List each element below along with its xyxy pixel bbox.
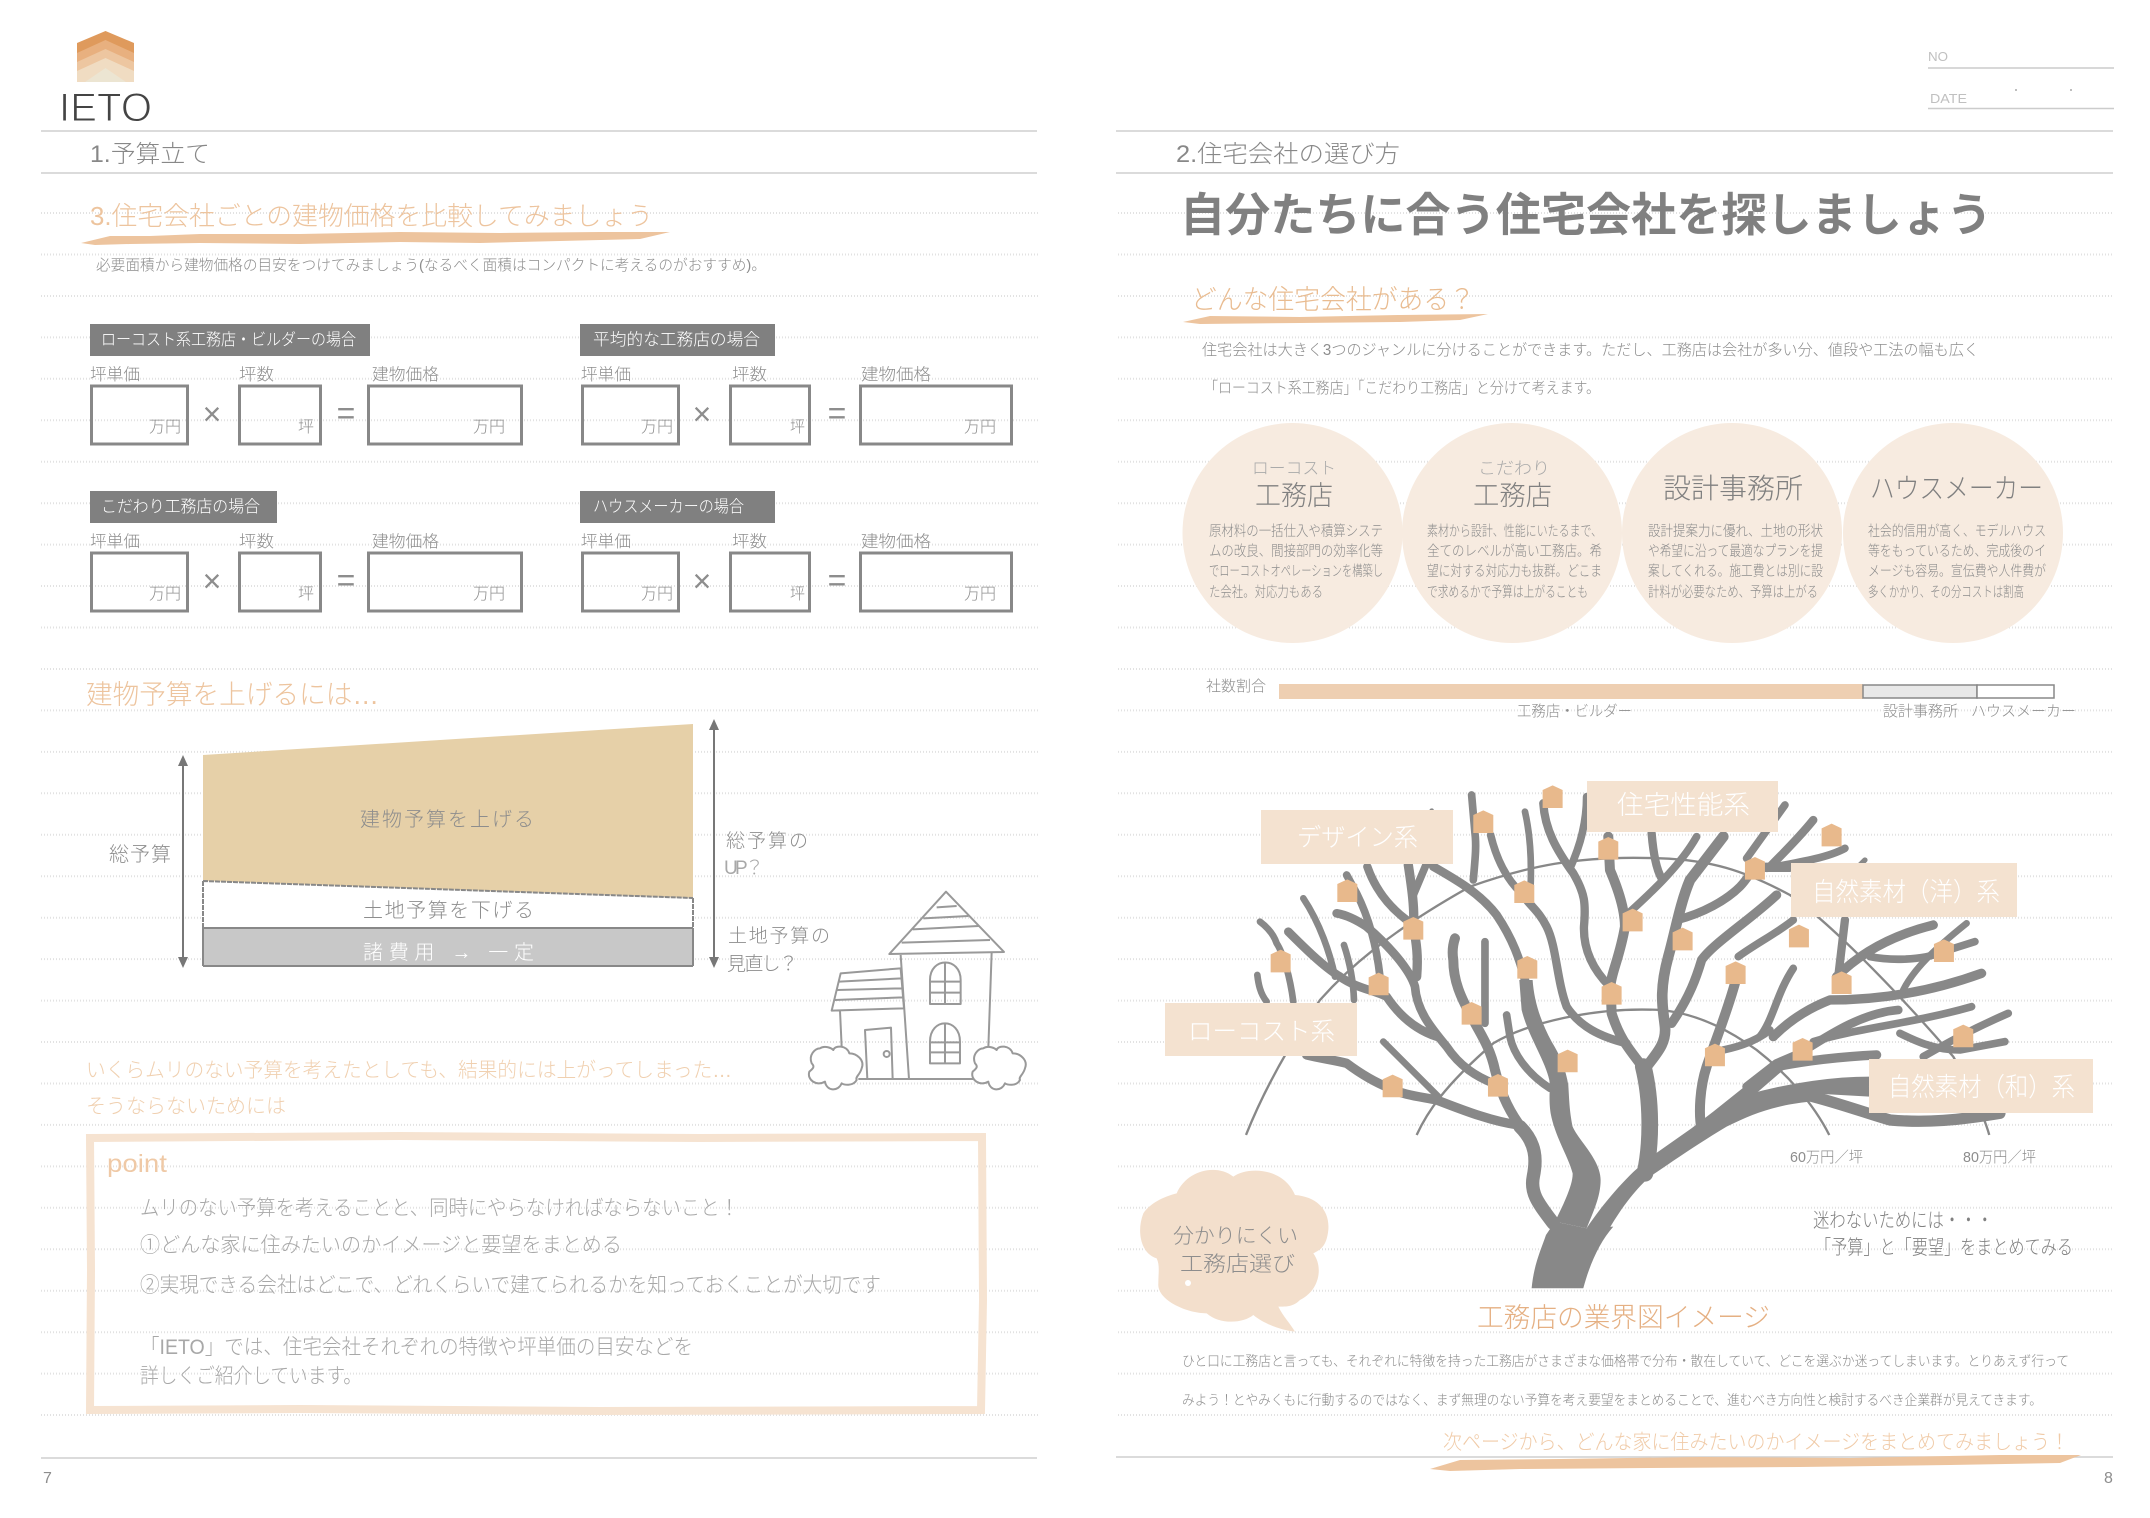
next page call-out: 次ページから、どんな家に住みたいのかイメージをまとめてみましょう！ bbox=[1443, 1431, 2069, 1454]
panel: custom builder formula: 坪 bbox=[298, 585, 314, 603]
circle: low cost builder: た会社。対応力もある bbox=[1209, 584, 1323, 601]
circle: low cost builder bbox=[1182, 423, 1402, 643]
budget chart: 総予算 bbox=[109, 843, 171, 866]
note: to avoid getting lost: 迷わないためには・・・ bbox=[1813, 1209, 1993, 1232]
explanatory paragraph: ひと口に工務店と言っても、それぞれに特徴を持った工務店がさまざまな価格帯で分布・散在していて、どこを選ぶか迷ってしまいます。とりあえず行って bbox=[1182, 1353, 2069, 1369]
panel: house maker formula: 建物価格 bbox=[861, 532, 932, 551]
heading: raising the building budget: 建物予算を上げるには… bbox=[86, 680, 379, 710]
panel: average formula: 万円 bbox=[641, 419, 673, 436]
budget chart: 見直し？ bbox=[727, 953, 798, 975]
circle: architect office bbox=[1622, 423, 1842, 643]
panel: average formula: 建物価格 bbox=[861, 365, 932, 384]
circle: house maker bbox=[1843, 423, 2063, 643]
budget chart: 総予算の bbox=[726, 830, 808, 852]
circle: custom builder: こだわり bbox=[1478, 459, 1550, 478]
logo: IETO bbox=[59, 31, 152, 130]
next page call-out bbox=[1430, 1431, 2081, 1471]
circle: architect office: 設計提案力に優れ、土地の形状 bbox=[1648, 523, 1823, 540]
no/date fields: NO bbox=[1928, 49, 1948, 64]
orange note bbox=[86, 1059, 732, 1118]
panel: house maker formula: ハウスメーカーの場合 bbox=[593, 497, 744, 516]
note: to avoid getting lost bbox=[1813, 1209, 2073, 1259]
orange note: そうならないためには bbox=[86, 1095, 286, 1118]
logo: IETO: IETO bbox=[59, 86, 152, 130]
label: performance: 住宅性能系 bbox=[1617, 790, 1750, 820]
panel: low cost formula: ローコスト系工務店・ビルダーの場合 bbox=[101, 330, 356, 349]
share bar chart: 社数割合 bbox=[1206, 678, 1266, 695]
intro paragraph bbox=[1202, 341, 1979, 397]
circle: custom builder: 素材から設計、性能にいたるまで、 bbox=[1427, 523, 1602, 540]
share bar chart bbox=[1206, 678, 2076, 720]
panel: low cost formula: 坪単価 bbox=[90, 365, 140, 384]
panel: low cost formula: 建物価格 bbox=[372, 365, 440, 384]
circle: custom builder: 全てのレベルが高い工務店。希 bbox=[1427, 543, 1602, 560]
panel: house maker formula: × bbox=[693, 563, 711, 599]
panel: house maker formula: 万円 bbox=[641, 586, 673, 603]
panel: point box: ②実現できる会社はどこで、どれくらいで建てられるかを知っておくことが大切です bbox=[140, 1274, 881, 1297]
intro paragraph: 住宅会社は大きく3つのジャンルに分けることができます。ただし、工務店は会社が多い分、値段や工法の幅も広く bbox=[1202, 341, 1979, 359]
panel: house maker formula: = bbox=[828, 562, 846, 598]
panel: low cost formula: 万円 bbox=[149, 419, 181, 436]
label: natural western: 自然素材（洋）系 bbox=[1812, 877, 2000, 907]
circle: low cost builder: 工務店 bbox=[1255, 481, 1333, 511]
panel: average formula bbox=[580, 324, 1012, 444]
panel: low cost formula: 万円 bbox=[473, 419, 505, 436]
left page section title: 1.予算立て bbox=[90, 141, 210, 168]
circle: low cost builder: 原材料の一括仕入や積算システ bbox=[1209, 523, 1383, 540]
panel: point box: ムリのない予算を考えることと、同時にやらなければならないこと！ bbox=[140, 1197, 739, 1220]
circle: architect office: 計料が必要なため、予算は上がる bbox=[1648, 584, 1818, 601]
budget chart: 諸費用 → 一定 bbox=[363, 941, 534, 964]
house markers on the tree bbox=[1271, 785, 1973, 1097]
panel: custom builder formula: 建物価格 bbox=[372, 532, 440, 551]
panel: point box: 詳しくご紹介しています。 bbox=[140, 1365, 362, 1388]
panel: point box: 「IETO」では、住宅会社それぞれの特徴や坪単価の目安などを bbox=[140, 1336, 693, 1359]
panel: custom builder formula bbox=[90, 491, 522, 611]
panel: house maker formula bbox=[580, 491, 1012, 611]
circle: low cost builder: ムの改良、間接部門の効率化等 bbox=[1209, 543, 1383, 560]
label: low cost: ローコスト系 bbox=[1188, 1018, 1335, 1046]
panel: house maker formula: 坪数 bbox=[732, 532, 767, 551]
budget chart: 土地予算を下げる bbox=[363, 899, 534, 922]
share bar chart: 工務店・ビルダー bbox=[1517, 703, 1632, 720]
explanatory paragraph: みよう！とやみくもに行動するのではなく、まず無理のない予算を考え要望をまとめることで、進むべき方向性と検討するべき企業群が見えてきます。 bbox=[1182, 1392, 2042, 1408]
budget chart: 建物予算を上げる bbox=[360, 808, 534, 831]
speech bubble: hard to choose: 分かりにくい bbox=[1173, 1225, 1298, 1248]
panel: low cost formula: 坪数 bbox=[239, 365, 274, 384]
panel: average formula: 坪単価 bbox=[581, 365, 631, 384]
note: to avoid getting lost: 「予算」と「要望」をまとめてみる bbox=[1815, 1236, 2073, 1259]
no/date fields bbox=[1928, 49, 2114, 108]
no/date fields: DATE bbox=[1930, 91, 1967, 106]
panel: average formula: = bbox=[828, 395, 846, 431]
circle: low cost builder: でローコストオペレーションを構築し bbox=[1209, 563, 1383, 580]
right page section title: 2.住宅会社の選び方 bbox=[1176, 141, 1400, 168]
panel: average formula: 坪 bbox=[790, 418, 805, 436]
intro text: 必要面積から建物価格の目安をつけてみましょう(なるべく面積はコンパクトに考えるのがおすすめ)。 bbox=[96, 257, 766, 274]
panel: house maker formula: 坪 bbox=[790, 585, 805, 603]
circle: house maker: メージも容易。宣伝費や人件費が bbox=[1868, 563, 2046, 580]
budget chart: 土地予算の bbox=[728, 925, 830, 947]
circle: house maker: 社会的信用が高く、モデルハウス bbox=[1868, 523, 2046, 540]
panel: point box: point bbox=[107, 1150, 167, 1178]
label: natural japanese bbox=[1869, 1059, 2093, 1113]
intro paragraph: 「ローコスト系工務店」「こだわり工務店」と分けて考えます。 bbox=[1204, 379, 1600, 397]
panel: custom builder formula: = bbox=[337, 562, 355, 598]
budget chart bbox=[109, 719, 830, 975]
panel: custom builder formula: 坪数 bbox=[239, 532, 274, 551]
circle: custom builder: で求めるかで予算は上がることも bbox=[1427, 584, 1588, 601]
panel: average formula: × bbox=[693, 396, 711, 432]
orange note: いくらムリのない予算を考えたとしても、結果的には上がってしまった… bbox=[86, 1059, 732, 1082]
circle: architect office: 案してくれる。施工費とは別に設 bbox=[1648, 563, 1823, 580]
page number 7: 7 bbox=[43, 1470, 52, 1487]
label: design bbox=[1261, 810, 1453, 864]
panel: low cost formula: = bbox=[337, 395, 355, 431]
panel: point box: ①どんな家に住みたいのかイメージと要望をまとめる bbox=[140, 1234, 622, 1257]
label: low cost bbox=[1165, 1003, 1357, 1056]
explanatory paragraph bbox=[1182, 1353, 2069, 1408]
circle: house maker: ハウスメーカー bbox=[1870, 473, 2043, 504]
panel: custom builder formula: 坪単価 bbox=[90, 532, 140, 551]
label: natural japanese: 自然素材（和）系 bbox=[1888, 1072, 2075, 1102]
circle: custom builder: 工務店 bbox=[1473, 481, 1552, 511]
share bar chart: ハウスメーカー bbox=[1971, 703, 2076, 720]
axis label: 80: 80万円／坪 bbox=[1963, 1149, 2036, 1166]
panel: house maker formula: 坪単価 bbox=[581, 532, 631, 551]
speech bubble: hard to choose: 工務店選び bbox=[1180, 1253, 1295, 1276]
circle: architect office: 設計事務所 bbox=[1663, 473, 1803, 504]
circle: house maker: 等をもっているため、完成後のイ bbox=[1868, 543, 2046, 560]
panel: custom builder formula: こだわり工務店の場合 bbox=[101, 497, 260, 516]
circle: low cost builder: ローコスト bbox=[1252, 459, 1336, 478]
icon: hand-drawn house bbox=[809, 892, 1026, 1089]
tree caption: 工務店の業界図イメージ bbox=[1477, 1303, 1770, 1333]
circle: house maker: 多くかかり、その分コストは割高 bbox=[1868, 584, 2024, 601]
panel: low cost formula: 坪 bbox=[298, 418, 314, 436]
page number 8: 8 bbox=[2104, 1470, 2113, 1487]
panel: point box bbox=[90, 1136, 983, 1411]
panel: house maker formula: 万円 bbox=[964, 586, 996, 603]
speech bubble: hard to choose bbox=[1140, 1170, 1328, 1332]
label: performance bbox=[1587, 781, 1778, 832]
circle: architect office: や希望に沿って最適なプランを提 bbox=[1648, 543, 1823, 560]
circle: custom builder bbox=[1402, 423, 1622, 643]
heading: what companies exist: どんな住宅会社がある？ bbox=[1191, 285, 1475, 315]
share bar chart: 設計事務所 bbox=[1883, 703, 1958, 720]
panel: custom builder formula: 万円 bbox=[149, 586, 181, 603]
panel: average formula: 平均的な工務店の場合 bbox=[593, 330, 760, 349]
tree chart bbox=[1165, 781, 2093, 1288]
panel: average formula: 坪数 bbox=[732, 365, 767, 384]
circle: custom builder: 望に対する対応力も抜群。どこま bbox=[1427, 563, 1602, 580]
panel: average formula: 万円 bbox=[964, 419, 996, 436]
axis label: 60: 60万円／坪 bbox=[1790, 1149, 1863, 1166]
main title: 自分たちに合う住宅会社を探しましょう bbox=[1180, 189, 1992, 241]
budget chart: UP？ bbox=[724, 858, 764, 879]
label: natural western bbox=[1791, 863, 2017, 917]
tree branches and price arcs bbox=[1246, 795, 2008, 1288]
panel: custom builder formula: × bbox=[203, 563, 221, 599]
heading: compare building prices bbox=[81, 201, 670, 245]
heading: compare building prices: 3.住宅会社ごとの建物価格を比較してみましょう bbox=[90, 201, 653, 231]
panel: low cost formula: × bbox=[203, 396, 221, 432]
panel: custom builder formula: 万円 bbox=[473, 586, 505, 603]
panel: low cost formula bbox=[90, 324, 522, 444]
label: design: デザイン系 bbox=[1297, 824, 1418, 852]
